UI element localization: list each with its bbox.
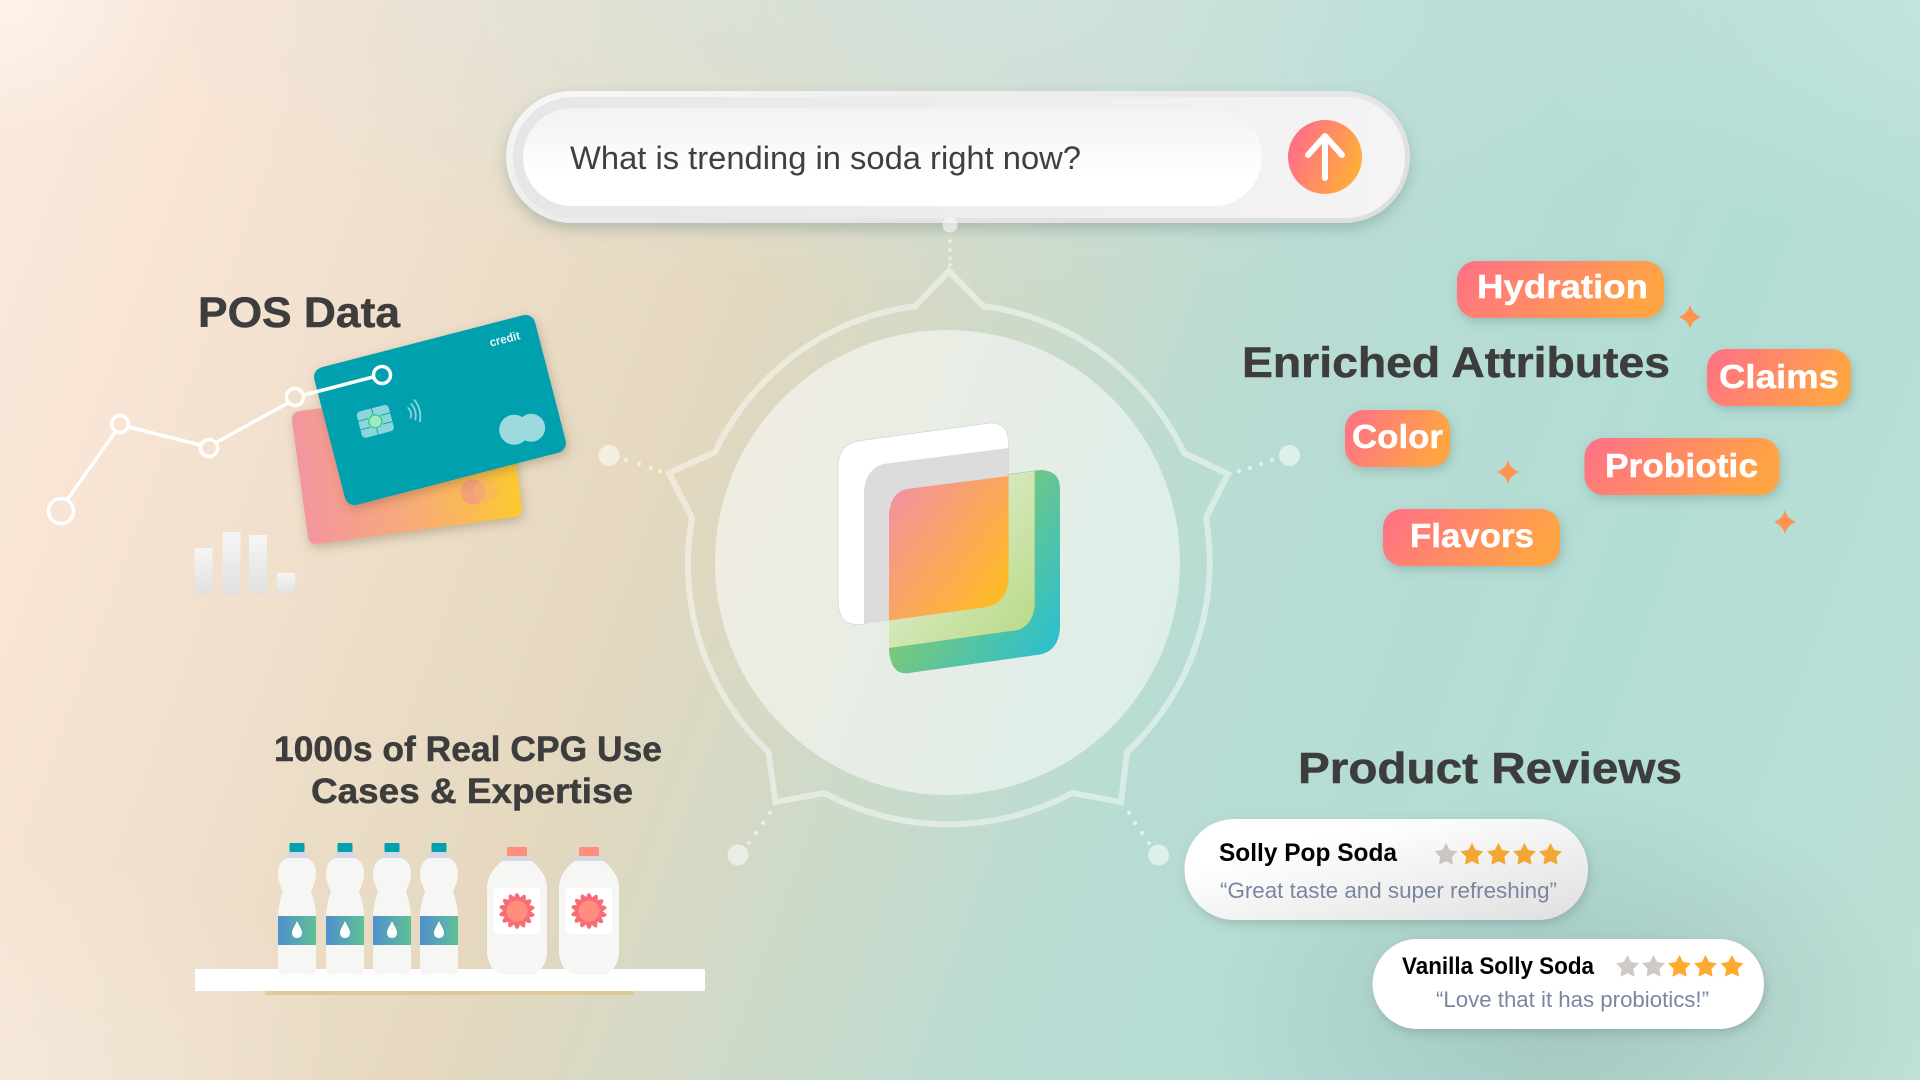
hub outer star-shaped ring (669, 271, 1228, 824)
card label: credit (488, 328, 522, 350)
star rating (1435, 843, 1562, 865)
teal credit card (312, 313, 568, 507)
star rating (1616, 955, 1743, 977)
card network circles (499, 414, 545, 445)
large flower-label bottles (487, 847, 619, 975)
pink credit card (291, 383, 523, 545)
review quote: “Love that it has probiotics!” (1436, 987, 1709, 1012)
heading: POS Data: POS Data (198, 289, 401, 337)
tag: Color: Color (1352, 418, 1443, 455)
panel: CPG use cases (195, 730, 705, 995)
contactless waves icon (407, 399, 422, 423)
logo: layered rounded squares (838, 423, 1060, 673)
heading: 1000s of Real CPG Use Cases & Expertise: Cases & Expertise (311, 772, 633, 811)
review quote: “Great taste and super refreshing” (1220, 878, 1557, 903)
shelf (195, 969, 705, 995)
panel: enriched attributes (1242, 261, 1851, 566)
tag: Flavors: Flavors (1410, 517, 1534, 554)
review card: Solly Pop Soda (1184, 819, 1588, 920)
heading: Enriched Attributes: Enriched Attributes (1242, 339, 1670, 387)
hub inner circle (715, 330, 1180, 795)
sparkles (1497, 305, 1796, 534)
tag: Claims: Claims (1719, 358, 1839, 395)
line chart (48, 366, 390, 524)
connector dots: dotted links from hub to each data source (598, 218, 1300, 866)
search bar outer rim (506, 91, 1410, 223)
search input pill (523, 108, 1262, 206)
review card: Vanilla Solly Soda (1372, 939, 1764, 1029)
send button with up arrow (1288, 120, 1362, 194)
tag: Claims (1707, 349, 1851, 406)
search query text: What is trending in soda right now? (570, 140, 1081, 176)
tag: Color (1345, 410, 1450, 467)
heading: Product Reviews: Product Reviews (1298, 744, 1682, 793)
tag: Hydration: Hydration (1477, 268, 1648, 305)
heading: 1000s of Real CPG Use Cases & Expertise: 1000s of Real CPG Use (274, 730, 662, 769)
tag: Probiotic (1584, 438, 1780, 495)
tag: Hydration (1457, 261, 1664, 318)
chip icon (356, 404, 395, 439)
central hub: ring, circle and logo (669, 271, 1228, 824)
bar chart (194, 532, 295, 594)
tag: Flavors (1383, 509, 1560, 566)
panel: POS data (48, 289, 568, 594)
search bar (506, 91, 1410, 223)
panel: product reviews (1184, 744, 1764, 1029)
product name: Vanilla Solly Soda (1402, 953, 1595, 980)
small water bottles (278, 843, 458, 976)
tag: Probiotic: Probiotic (1605, 447, 1758, 484)
search bar inner ring (513, 97, 1405, 218)
product name: Solly Pop Soda (1219, 839, 1398, 867)
